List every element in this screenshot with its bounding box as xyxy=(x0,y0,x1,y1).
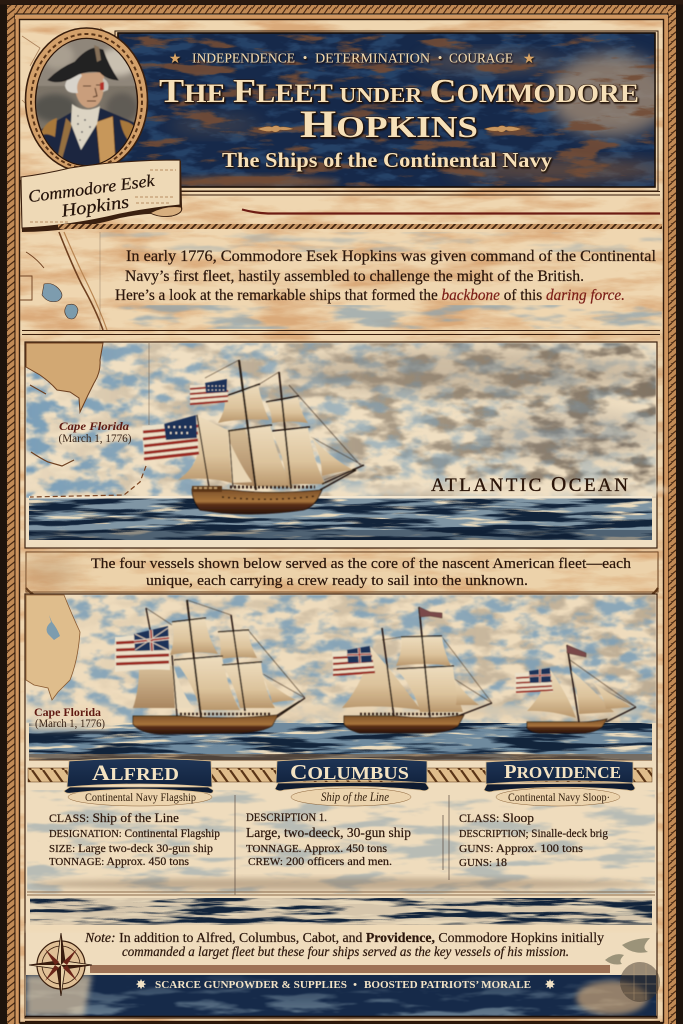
specs: Providence xyxy=(459,810,608,869)
header map sketch xyxy=(22,28,118,112)
hat xyxy=(48,48,118,82)
banner: Columbus: COLUMBUS xyxy=(290,760,409,784)
header rules xyxy=(180,192,660,214)
tagline: INDEPENDENCE xyxy=(192,50,295,66)
footer text: • xyxy=(353,979,357,991)
panel: title banner xyxy=(115,31,672,191)
lapel xyxy=(96,116,116,165)
map: Florida inset xyxy=(26,595,80,700)
tagline: • xyxy=(438,50,442,65)
banner: Columbus xyxy=(275,758,429,806)
coat xyxy=(41,108,134,165)
banner: Providence: Continental Navy Sloop· xyxy=(508,790,610,804)
name scroll: Hopkins xyxy=(59,191,130,221)
ship: main vessel xyxy=(142,360,364,514)
note: commanded a larget fleet but these four ships served as the key vessels of his mission. xyxy=(122,944,569,959)
panel: Atlantic scene xyxy=(25,342,670,548)
banner: Providence: PROVIDENCE xyxy=(504,761,621,783)
note xyxy=(84,930,604,959)
specifications background wisps xyxy=(27,790,655,895)
specs: Providence: DESCRIPTION; Sinalle-deck brig xyxy=(459,826,608,840)
footer text: SCARCE GUNPOWDER & SUPPLIES xyxy=(155,979,347,991)
intro text: Here’s a look at the remarkable ships that formed the backbone of this daring force. xyxy=(115,287,625,304)
ribbon: fleet intro: The four vessels shown below served as the core of the nascent American fleet—each xyxy=(91,556,632,572)
label: Cape Florida: (March 1, 1776) xyxy=(58,431,132,445)
cravat xyxy=(71,104,100,150)
sea strip xyxy=(26,898,656,931)
intro text xyxy=(115,248,656,304)
panel: intro xyxy=(20,232,662,334)
icon: globe and foliage xyxy=(605,938,660,1002)
banner: Providence xyxy=(484,760,635,806)
map: Florida xyxy=(26,343,149,497)
footer text xyxy=(135,978,556,992)
specs: Alfred: TONNAGE: Approx. 450 tons xyxy=(49,854,189,868)
ribbon: fleet intro xyxy=(22,552,658,597)
tagline xyxy=(169,50,535,67)
flag: small xyxy=(190,379,228,405)
tagline: DETERMINATION xyxy=(315,50,430,66)
tagline: COURAGE xyxy=(449,50,513,66)
flag: Columbus xyxy=(332,646,375,677)
sea xyxy=(29,496,652,540)
sea xyxy=(29,723,652,761)
ship: Columbus xyxy=(332,607,492,733)
flag: Alfred xyxy=(115,626,170,672)
footer band xyxy=(25,965,660,1022)
label: Atlantic Ocean: ATLANTIC OCEAN xyxy=(431,472,628,496)
map inset xyxy=(20,232,107,330)
specs: Alfred: SIZE: Large two-deck 30-gun ship xyxy=(49,841,213,855)
banner: Columbus: Ship of the Line xyxy=(321,790,389,804)
specs: Providence: GUNS: 18 xyxy=(459,855,507,869)
title flourishes xyxy=(257,126,522,132)
specs: Columbus: Large, two-deeck, 30-gun ship xyxy=(246,825,411,840)
specs: Providence: GUNS: Approx. 100 tons xyxy=(459,841,583,855)
banner: Alfred: Continental Navy Flagship xyxy=(85,790,196,804)
flag: Providence pennant xyxy=(567,645,586,657)
title: THE FLEET UNDER COMMODORE xyxy=(159,73,639,110)
portrait medallion xyxy=(26,28,148,172)
note: Note: In addition to Alfred, Columbus, Cabot, and Providence, Commodore Hopkins initially xyxy=(84,930,604,945)
label: Cape Florida inset: (March 1, 1776) xyxy=(35,716,105,730)
tagline: ★ xyxy=(523,52,535,67)
scroll text: Commodore Esek xyxy=(27,171,156,206)
head xyxy=(74,72,104,108)
ship: Providence xyxy=(515,645,636,733)
rope band xyxy=(28,768,652,782)
flag: Columbus pennant xyxy=(419,607,442,618)
specs: Alfred: DESIGNATION: Continental Flagship xyxy=(49,826,220,840)
flag: Providence xyxy=(515,668,553,693)
specs: Columbus: TONNAGE. Approx. 450 tons xyxy=(246,841,387,855)
specs: Providence: CLASS: Sloop xyxy=(459,810,534,825)
specs: Columbus: DESCRIPTION 1. xyxy=(246,812,327,824)
title: HOPKINS xyxy=(300,103,478,146)
intro text: Navy’s first fleet, hastily assembled to challenge the might of the British. xyxy=(125,268,584,285)
footer text: BOOSTED PATRIOTS’ MORALE xyxy=(364,979,531,991)
flag: large xyxy=(142,415,199,461)
icon: compass rose xyxy=(29,933,92,996)
ribbon: fleet intro: unique, each carrying a crew ready to sail into the unknown. xyxy=(146,573,528,589)
label: Cape Florida inset xyxy=(30,705,110,730)
footer text: ✸ xyxy=(544,978,556,992)
label: Cape Florida inset: Cape Florida xyxy=(34,705,101,719)
name scroll xyxy=(20,160,182,232)
tagline: ★ xyxy=(169,52,181,67)
label: Cape Florida: Cape Florida xyxy=(59,419,129,433)
banner: Alfred xyxy=(64,758,213,806)
label: Cape Florida xyxy=(58,419,132,445)
specs: Alfred xyxy=(49,810,220,868)
panel: three ships scene xyxy=(25,594,657,1018)
specs: Columbus xyxy=(246,812,411,868)
ship: Alfred xyxy=(115,600,305,734)
subtitle: The Ships of the Continental Navy xyxy=(222,148,553,172)
banner: Alfred: ALFRED xyxy=(92,760,179,785)
footer text: ✸ xyxy=(135,978,147,992)
tagline: • xyxy=(303,50,307,65)
title xyxy=(159,73,639,146)
intro text: In early 1776, Commodore Esek Hopkins was given command of the Continental xyxy=(126,248,656,265)
specs: Columbus: CREW: 200 officers and men. xyxy=(248,854,392,868)
specs: Alfred: CLASS: Ship of the Line xyxy=(49,810,179,825)
rope divider xyxy=(58,224,662,229)
